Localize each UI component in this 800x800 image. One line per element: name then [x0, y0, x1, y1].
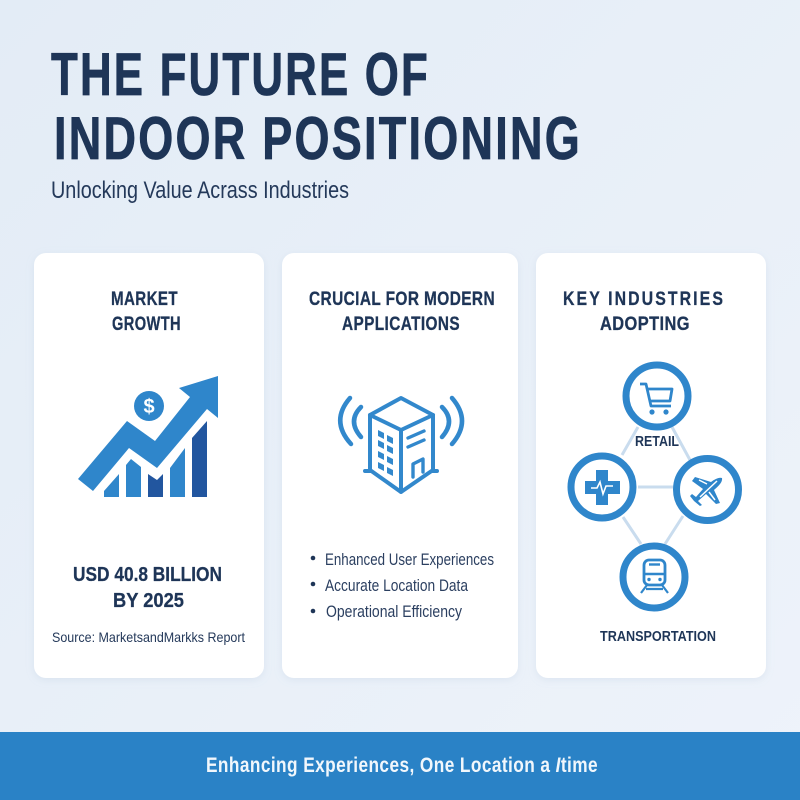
panel: modern applications [282, 253, 518, 678]
network connectors [622, 427, 690, 544]
bullet list: Operational Efficiency [326, 602, 462, 621]
header: title and subtitle [51, 41, 582, 204]
heading: key industries adopting: ADOPTING [600, 314, 690, 335]
bullet list [311, 550, 494, 621]
bullet list: Enhanced User Experiences [325, 550, 494, 569]
icon: growth arrow with bars and dollar coin [78, 376, 218, 497]
panel: market growth [34, 253, 264, 678]
title [51, 41, 582, 172]
heading: market growth [111, 289, 181, 335]
icon: train [623, 546, 685, 608]
heading: key industries adopting [563, 289, 725, 335]
icon: airplane [676, 458, 738, 520]
footer banner [0, 732, 800, 800]
footer banner: Enhancing Experiences, One Location a Itime [206, 754, 598, 777]
market figure: USD 40.8 BILLION [73, 564, 222, 586]
market figure [73, 564, 222, 612]
bullet list: Accurate Location Data [325, 576, 468, 595]
icon: growth arrow with bars and dollar coin: $ [143, 396, 155, 418]
source note: Source: MarketsandMarkks Report [52, 629, 245, 645]
heading: crucial for modern applications: CRUCIAL FOR MODERN [309, 289, 495, 310]
heading: market growth: GROWTH [112, 314, 181, 335]
icon: healthcare cross [571, 456, 633, 518]
title: THE FUTURE OF [51, 41, 430, 108]
heading: crucial for modern applications [309, 289, 495, 335]
heading: market growth: MARKET [111, 289, 178, 310]
panel: key industries [536, 253, 766, 678]
label: transportation: TRANSPORTATION [600, 629, 716, 645]
icon: connected building [340, 398, 462, 492]
subtitle: Unlocking Value Acrass Industries [51, 177, 349, 204]
heading: key industries adopting: KEY INDUSTRIES [563, 289, 725, 310]
market figure: BY 2025 [113, 590, 184, 612]
title: INDOOR POSITIONING [54, 105, 582, 172]
icon: retail cart [626, 365, 688, 427]
heading: crucial for modern applications: APPLICATIONS [342, 314, 460, 335]
label: retail: RETAIL [635, 434, 679, 450]
